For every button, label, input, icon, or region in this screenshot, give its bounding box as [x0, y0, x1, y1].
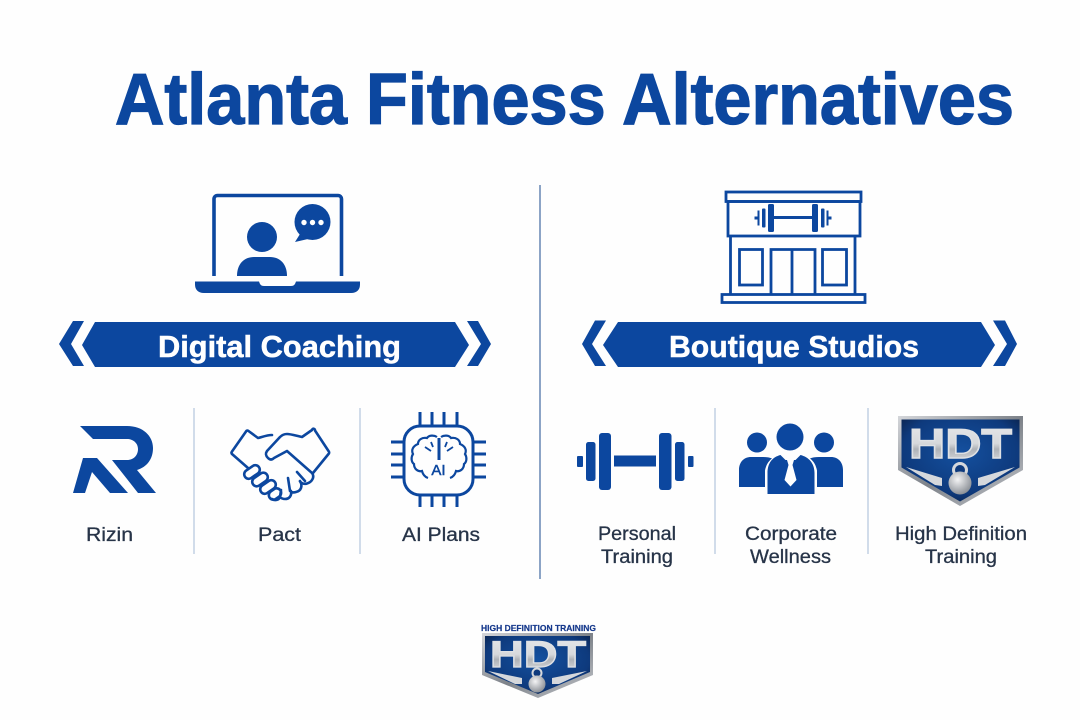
item: High Definition Training [895, 416, 1027, 568]
panel: boutique studios [577, 192, 1027, 568]
item: AI Plans [391, 412, 486, 546]
icon: dumbbell [577, 433, 694, 490]
icon: laptop with video coach [195, 196, 360, 293]
footer logo: High Definition Training: HIGH DEFINITION TRAINING [481, 623, 596, 633]
footer logo: High Definition Training [481, 623, 596, 698]
label: Personal Training: Personal [598, 524, 676, 545]
footer logo: High Definition Training: HDT [490, 634, 586, 675]
banner: digital coaching: Digital Coaching [158, 329, 401, 364]
item: Pact [232, 429, 329, 546]
icon: gym storefront [722, 192, 865, 302]
banner: digital coaching [59, 321, 491, 367]
label: Rizin: Rizin [86, 525, 133, 546]
icon: AI brain chip: AI [431, 462, 446, 479]
label: Pact: Pact [258, 525, 302, 546]
item: Rizin [73, 426, 156, 546]
icon: Rizin R logo [73, 426, 156, 493]
item: Corporate Wellness [739, 424, 843, 568]
label: High Definition Training: High Definition [895, 524, 1027, 545]
item: Personal Training [577, 433, 694, 568]
icon: corporate team [739, 424, 843, 494]
panel: digital coaching [59, 196, 491, 554]
title: Atlanta Fitness Alternatives [115, 60, 1014, 140]
badge: HDT logo: HDT [909, 420, 1012, 467]
icon: handshake [232, 429, 329, 501]
badge: HDT logo [898, 416, 1023, 506]
label: AI Plans: AI Plans [402, 525, 480, 546]
banner: boutique studios [582, 320, 1017, 367]
label: High Definition Training: Training [925, 547, 997, 568]
label: Corporate Wellness: Corporate [745, 524, 837, 545]
label: Personal Training: Training [601, 547, 673, 568]
banner: boutique studios: Boutique Studios [669, 329, 919, 364]
label: Corporate Wellness: Wellness [750, 547, 831, 568]
